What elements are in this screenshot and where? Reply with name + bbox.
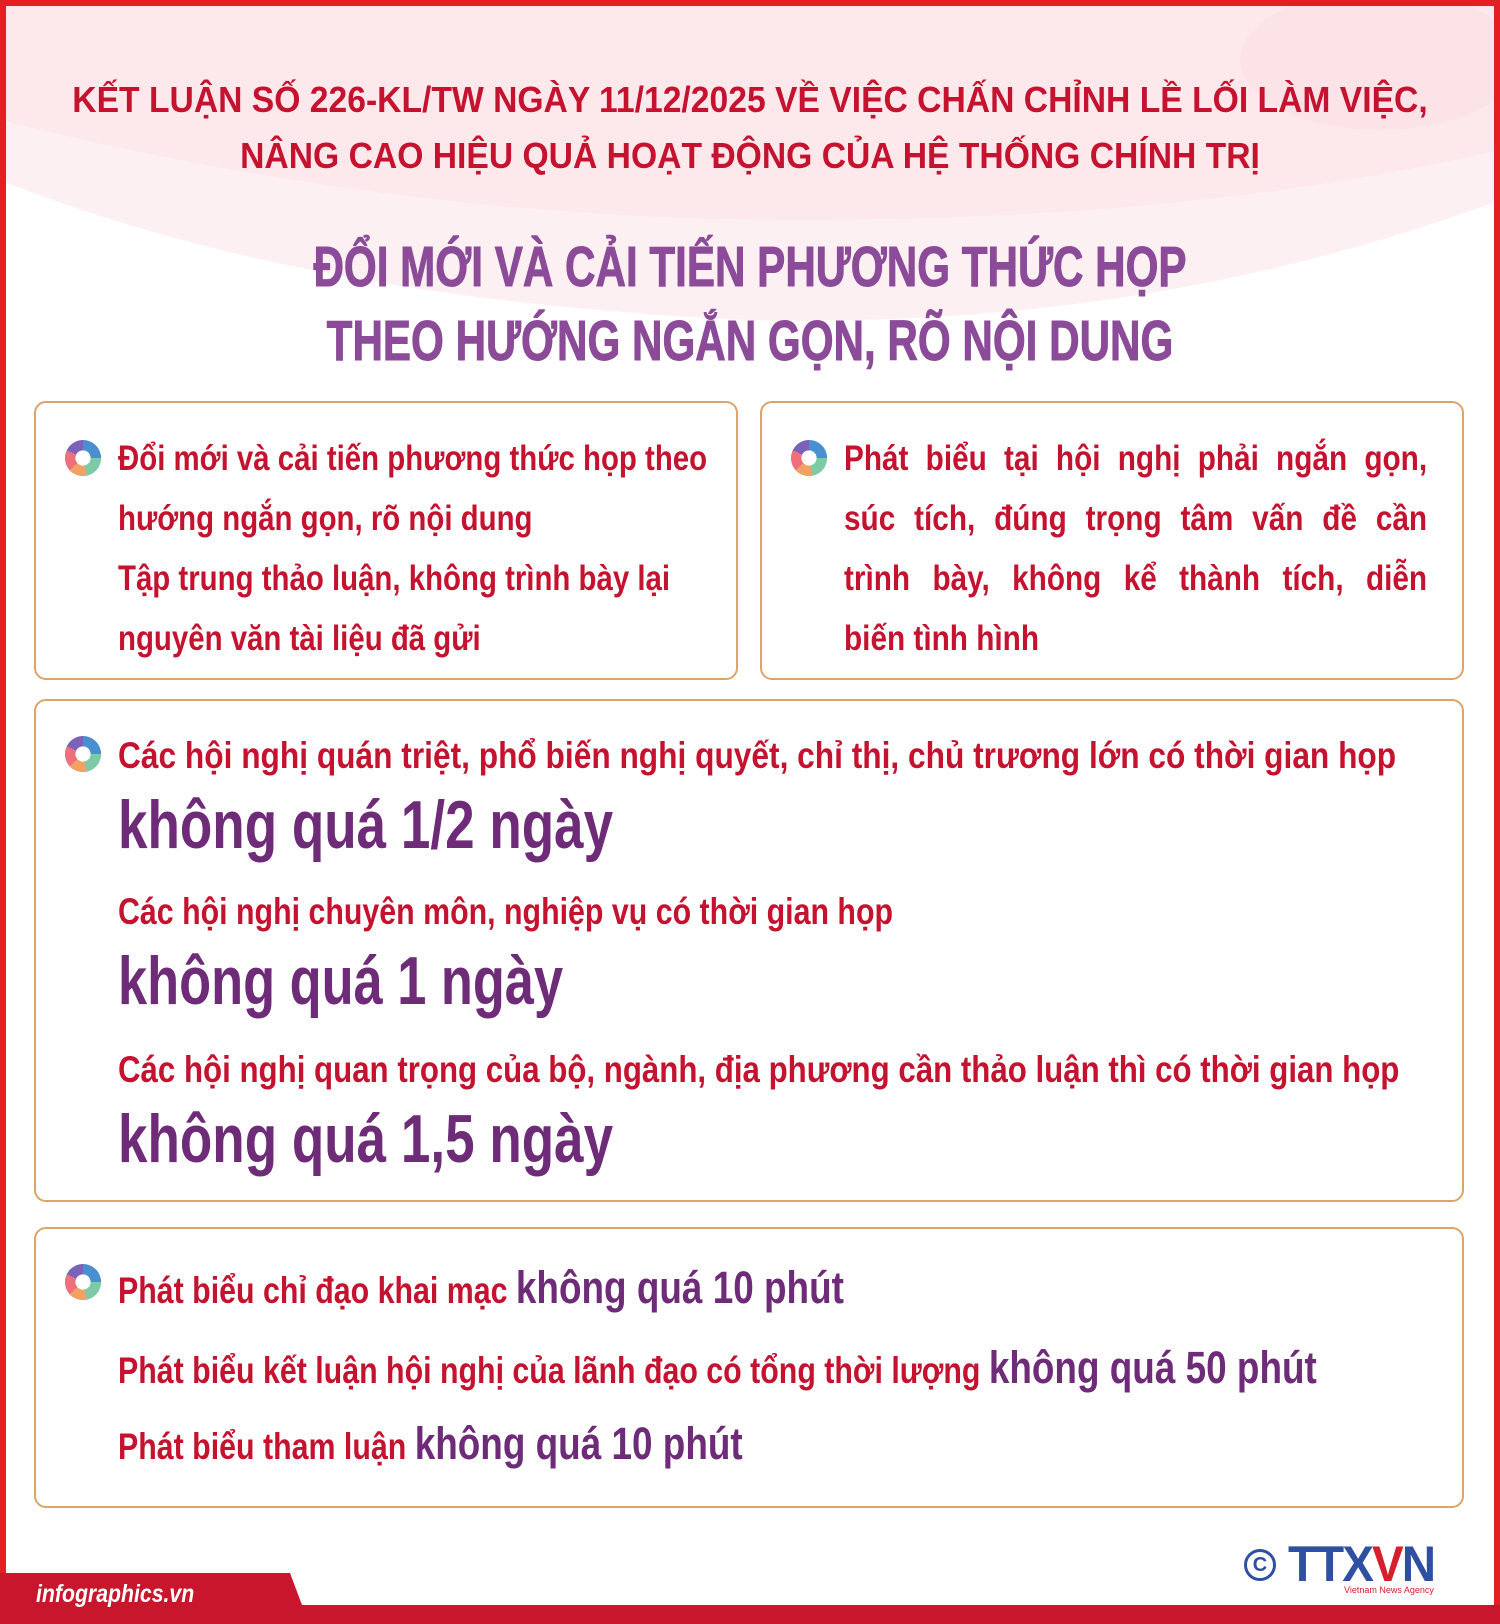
highlight: 1/2 day: không quá 1/2 ngày: [118, 787, 613, 863]
text: professional: Các hội nghị chuyên môn, nghiệp vụ có thời gian họp: [118, 891, 893, 932]
panel: meeting method: [34, 401, 738, 680]
footer: website: infographics.vn: [36, 1580, 194, 1608]
title: NÂNG CAO HIỆU QUẢ HOẠT ĐỘNG CỦA HỆ THỐNG CHÍNH TRỊ: [240, 135, 1260, 176]
text block: Đổi mới và cải tiến phương thức họp theo: [118, 439, 707, 478]
text block: biến tình hình: [844, 619, 1039, 658]
panel: speeches: [760, 401, 1464, 680]
text block: trình bày, không kể thành tích, diễn: [844, 559, 1427, 598]
text: concluding speech: Phát biểu kết luận hội nghị của lãnh đạo có tổng thời lượng không quá 50 phút: [118, 1342, 1317, 1393]
text block: nguyên văn tài liệu đã gửi: [118, 619, 481, 658]
panel: meeting durations: [34, 699, 1464, 1202]
text block: hướng ngắn gọn, rõ nội dung: [118, 499, 533, 538]
subtitle: THEO HƯỚNG NGẮN GỌN, RÕ NỘI DUNG: [327, 309, 1173, 373]
text: important: Các hội nghị quan trọng của bộ, ngành, địa phương cần thảo luận thì có thời gian họp: [118, 1049, 1399, 1090]
title: [72, 79, 1428, 176]
icon: aperture: [64, 736, 102, 772]
logo: TTXVN: C: [1253, 1554, 1267, 1576]
text block: [844, 438, 1427, 658]
logo: TTXVN: Vietnam News Agency: [1344, 1585, 1434, 1595]
background waves: [6, 6, 1494, 320]
icon: aperture: [64, 440, 102, 476]
logo: TTXVN: TTXVN: [1288, 1536, 1434, 1592]
icon: aperture: [790, 440, 828, 476]
icon: aperture: [64, 1264, 102, 1300]
text block: [118, 439, 707, 658]
text: discussion: Phát biểu tham luận không quá 10 phút: [118, 1418, 743, 1469]
subtitle: [313, 234, 1187, 373]
panel: speech durations: [34, 1227, 1464, 1508]
text block: Tập trung thảo luận, không trình bày lại: [118, 559, 670, 598]
title: KẾT LUẬN SỐ 226-KL/TW NGÀY 11/12/2025 VỀ VIỆC CHẤN CHỈNH LỀ LỐI LÀM VIỆC,: [72, 79, 1428, 120]
text block: súc tích, đúng trọng tâm vấn đề cần: [844, 499, 1427, 538]
text: opening speech: Phát biểu chỉ đạo khai mạc không quá 10 phút: [118, 1262, 844, 1313]
highlight: 1.5 days: không quá 1,5 ngày: [118, 1101, 613, 1177]
text block: Phát biểu tại hội nghị phải ngắn gọn,: [844, 439, 1427, 478]
footer bar: [0, 1573, 1500, 1624]
text: dissemination: Các hội nghị quán triệt, phổ biến nghị quyết, chỉ thị, chủ trương lớn có thời gian họp: [118, 735, 1396, 776]
subtitle: ĐỔI MỚI VÀ CẢI TIẾN PHƯƠNG THỨC HỌP: [313, 235, 1187, 299]
highlight: 1 day: không quá 1 ngày: [118, 943, 563, 1019]
